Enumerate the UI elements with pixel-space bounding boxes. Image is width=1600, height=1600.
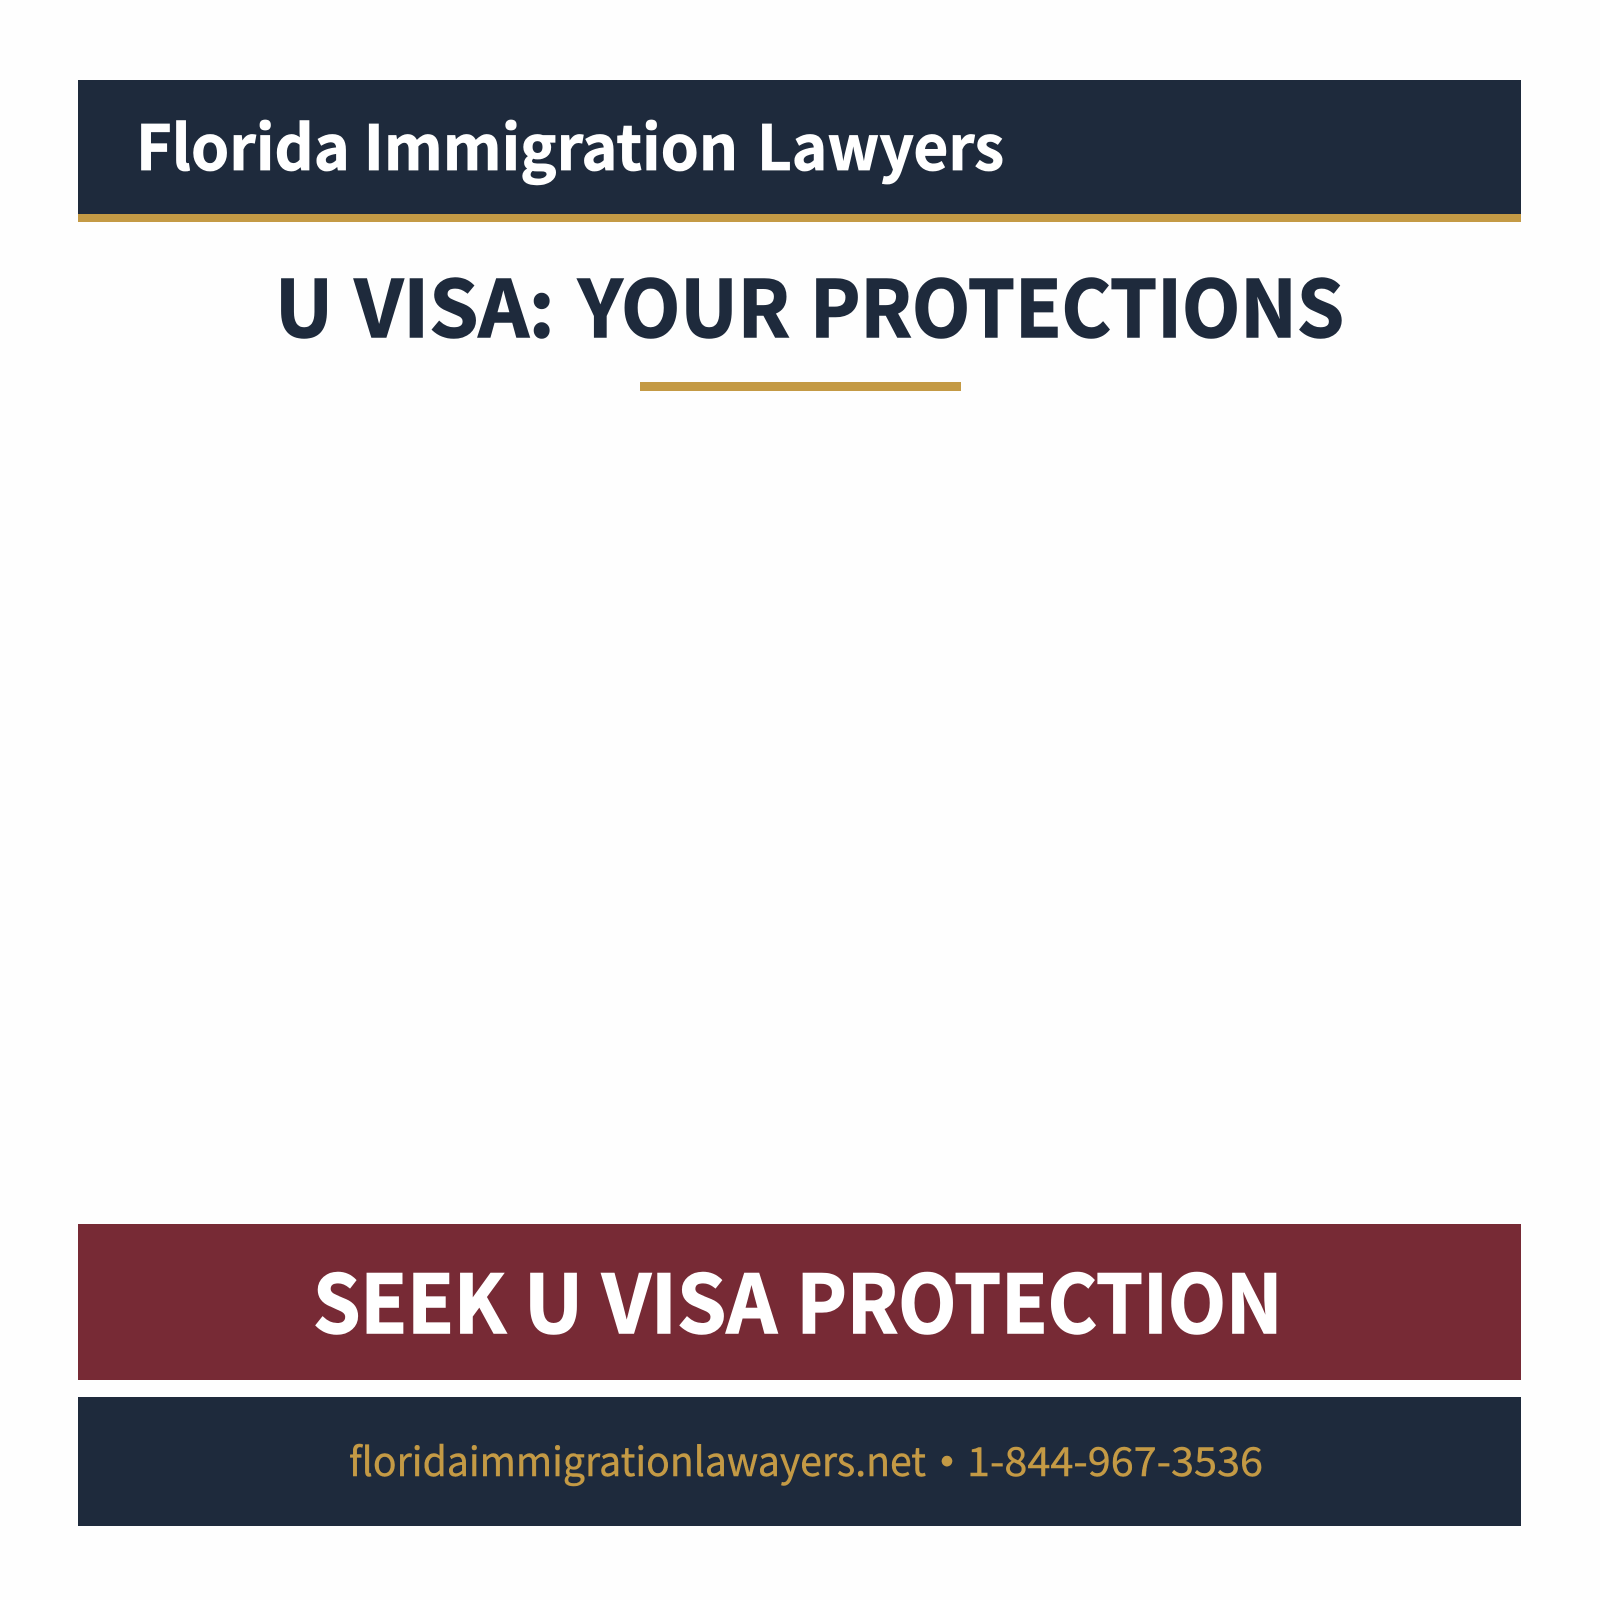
main title: PROTECTIONS (810, 248, 1344, 360)
main title: VISA: (353, 248, 554, 360)
call to action text: SEEK (313, 1241, 507, 1357)
header banner (78, 80, 1521, 222)
firm name: Florida Immigration (136, 98, 738, 188)
contact details: • (927, 1430, 967, 1488)
call to action banner (78, 1224, 1521, 1380)
firm name: Lawyers (757, 98, 1004, 188)
header gold rule (78, 214, 1521, 222)
header navy bar (78, 80, 1521, 214)
call to action text (313, 1241, 1282, 1357)
call to action text: U (524, 1241, 583, 1357)
red bar (78, 1224, 1521, 1380)
contact details (349, 1430, 1263, 1488)
call to action text: VISA (601, 1241, 778, 1357)
main title (275, 248, 1344, 360)
main title: U (275, 248, 333, 360)
title block (275, 248, 1344, 391)
contact details: floridaimmigrationlawayers.net (349, 1430, 926, 1488)
call to action text: PROTECTION (796, 1241, 1282, 1357)
footer navy bar (78, 1397, 1521, 1526)
title gold underline (640, 382, 961, 391)
footer contact banner (78, 1397, 1521, 1526)
contact details: 1-844-967-3536 (967, 1430, 1263, 1488)
main title: YOUR (577, 248, 790, 360)
